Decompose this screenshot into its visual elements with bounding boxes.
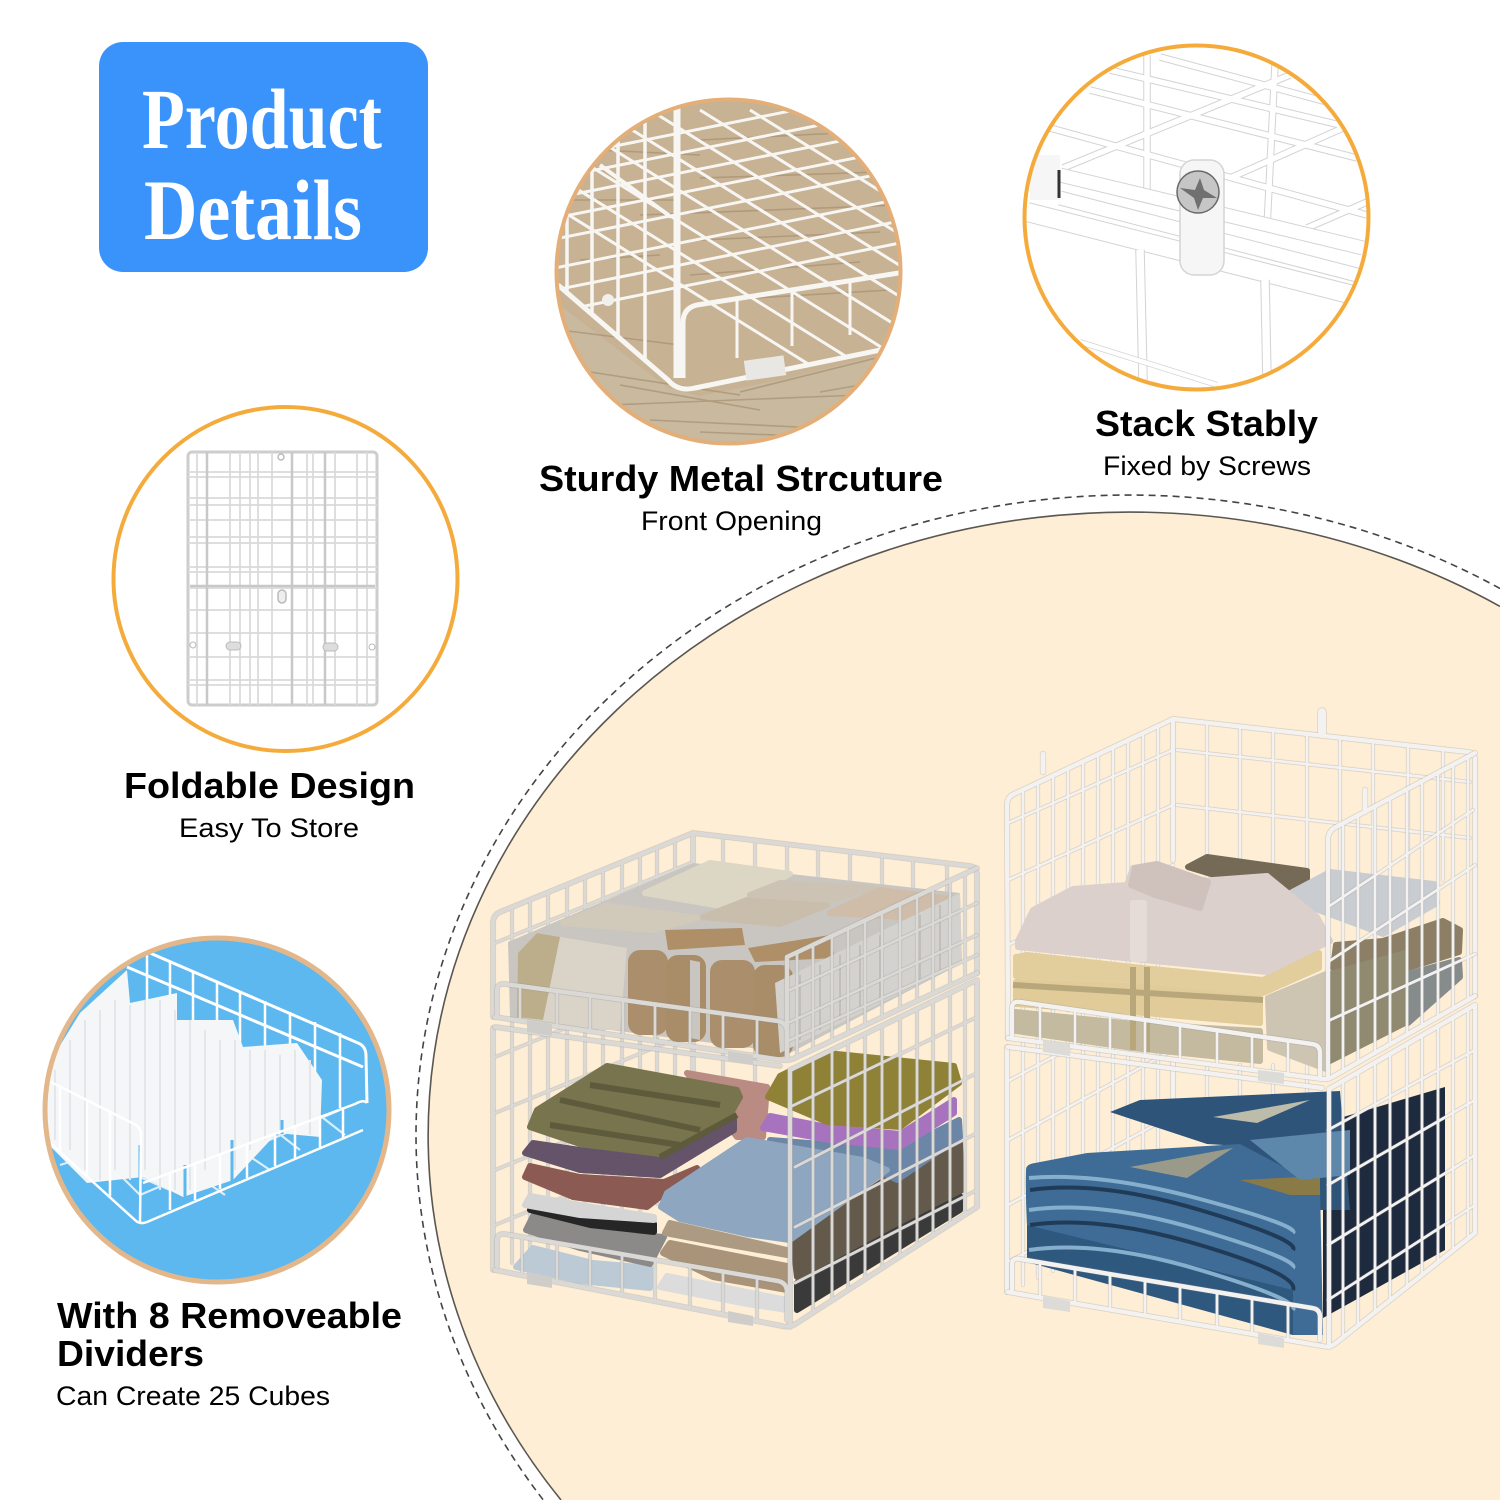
organizer: upper left basket contents <box>508 863 962 1057</box>
heading: with 8 removeable dividers: With 8 Removeable <box>57 1295 402 1336</box>
illustration: left stacked baskets <box>493 833 977 1327</box>
wire: right basket back walls <box>1007 712 1475 1292</box>
fabric: jeans stack <box>1026 1087 1445 1335</box>
title badge <box>99 42 428 272</box>
background circle panel <box>416 495 1500 1500</box>
clips: right basket <box>1043 1040 1284 1348</box>
fabric: lower left stacks <box>516 1066 767 1288</box>
heading: sturdy metal structure: Sturdy Metal Strcuture <box>539 458 943 499</box>
wire: left basket front walls <box>495 868 977 1327</box>
title badge: Details <box>144 162 362 258</box>
text: can create 25 cubes: Can Create 25 Cubes <box>56 1381 330 1411</box>
illustration: right stacked baskets <box>1007 712 1475 1348</box>
clips: left basket <box>527 1020 753 1326</box>
panel: removable dividers circle <box>43 938 389 1282</box>
text: front opening: Front Opening <box>641 506 822 536</box>
heading: stack stably: Stack Stably <box>1095 403 1318 444</box>
icon: screw <box>1177 171 1219 213</box>
heading: foldable design: Foldable Design <box>124 765 415 806</box>
text: easy to store: Easy To Store <box>179 813 359 843</box>
panel: sturdy metal structure detail circle <box>554 98 902 446</box>
dividers <box>43 970 322 1197</box>
text: fixed by screws: Fixed by Screws <box>1103 451 1311 481</box>
wire: right basket front walls <box>1008 753 1475 1347</box>
heading: with 8 removeable dividers: Dividers <box>57 1333 204 1374</box>
panel: foldable design circle <box>114 407 458 751</box>
fabric: folded shirts stack <box>1013 857 1460 1069</box>
title badge: Product <box>142 71 382 167</box>
panel: stack stably screw detail circle <box>1024 46 1368 390</box>
heading: with 8 removeable dividers <box>57 1295 402 1374</box>
wire: left basket back walls <box>493 833 977 1270</box>
fabric: lower right stacks <box>660 1053 962 1310</box>
